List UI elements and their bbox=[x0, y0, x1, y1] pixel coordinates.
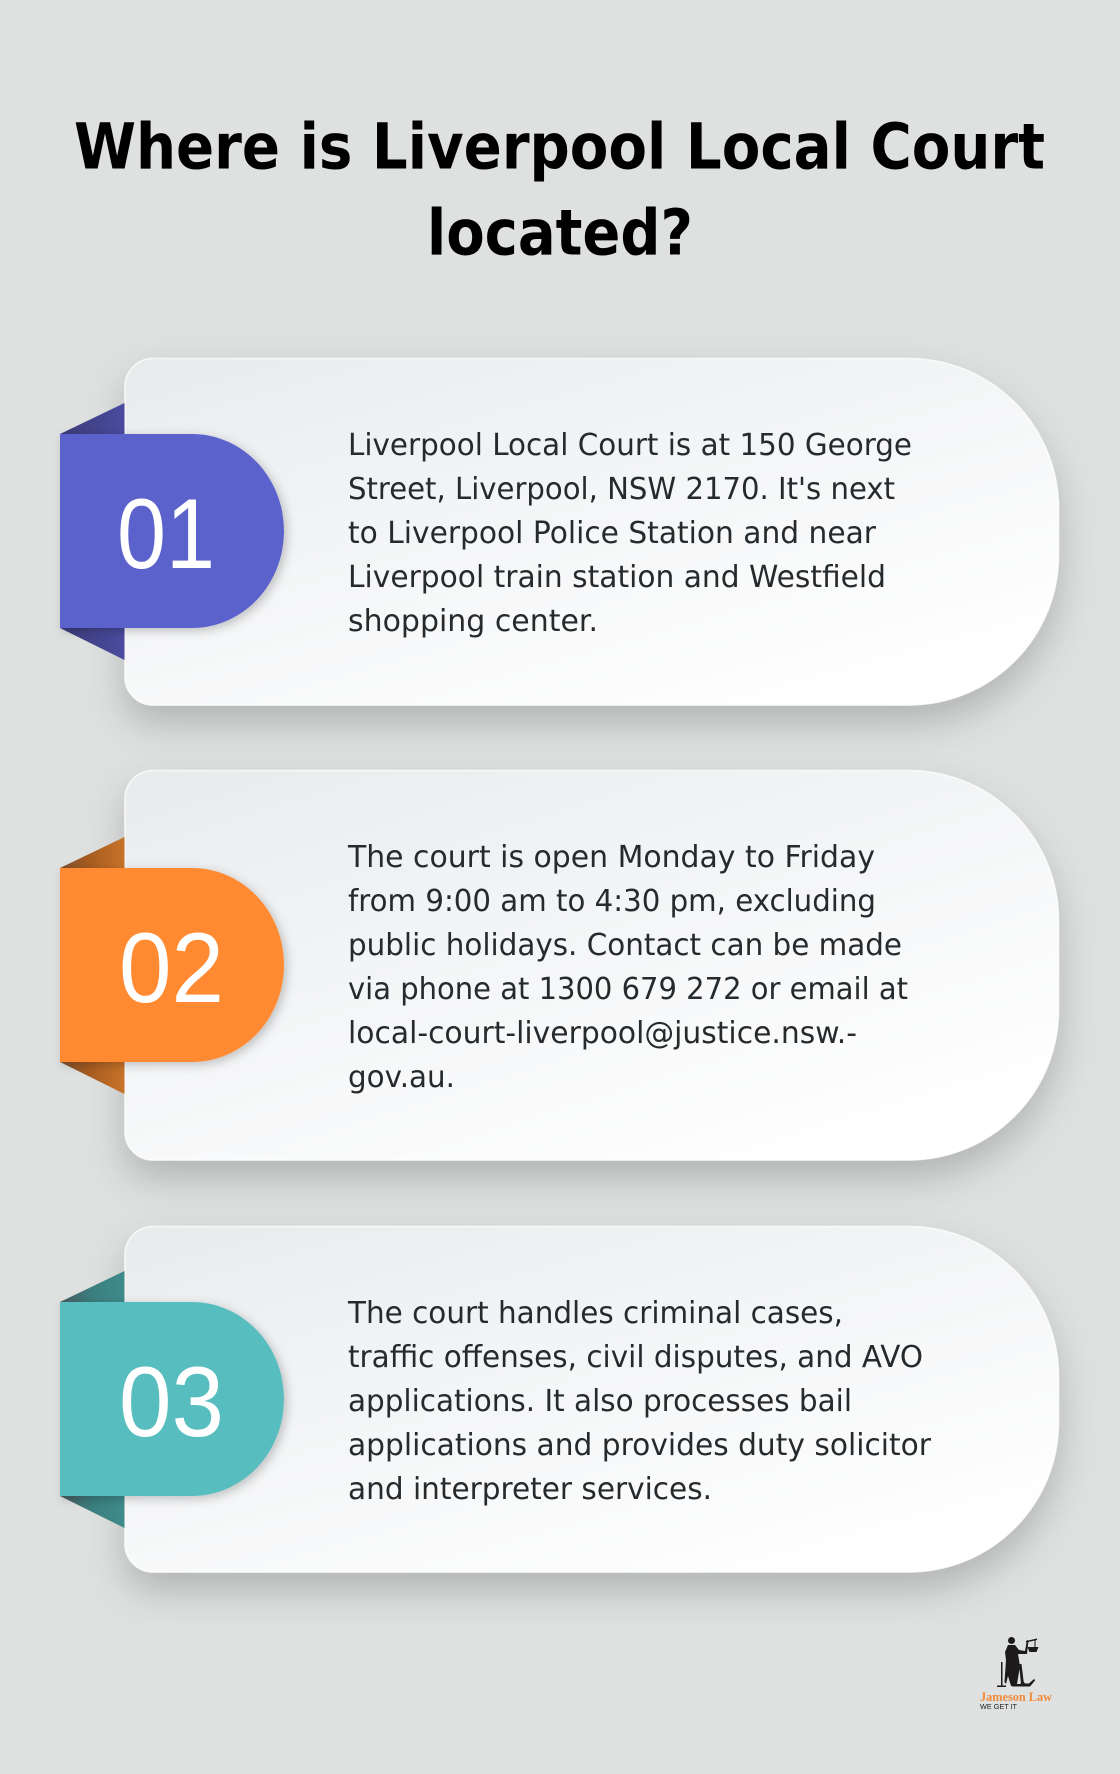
panel: step 02 bbox=[60, 770, 1059, 1160]
ribbon fold top 02 bbox=[60, 837, 124, 868]
card 01 bbox=[125, 358, 1059, 705]
panel: step 01 bbox=[60, 358, 1059, 705]
text 03: The court handles criminal cases, bbox=[347, 1296, 843, 1331]
text 01: to Liverpool Police Station and near bbox=[348, 516, 877, 551]
title: located? bbox=[427, 196, 693, 270]
text 03 bbox=[347, 1296, 932, 1507]
text 02: The court is open Monday to Friday bbox=[347, 840, 875, 875]
tagline: WE GET IT bbox=[980, 1704, 1018, 1711]
text 01: shopping center. bbox=[348, 604, 598, 639]
text 03: applications. It also processes bail bbox=[348, 1384, 852, 1419]
number 01: 01 bbox=[117, 478, 215, 589]
logo: Jameson Law bbox=[980, 1637, 1052, 1711]
ribbon fold bottom 01 bbox=[60, 628, 124, 660]
card 02 bbox=[125, 770, 1059, 1160]
panel: step 03 bbox=[60, 1226, 1059, 1572]
ribbon fold top 01 bbox=[60, 403, 124, 434]
text 01 bbox=[348, 428, 912, 639]
text 02: via phone at 1300 679 272 or email at bbox=[348, 972, 908, 1007]
icon: lady justice bbox=[997, 1637, 1038, 1687]
ribbon fold bottom 02 bbox=[60, 1062, 124, 1094]
text 03: traffic offenses, civil disputes, and AVO bbox=[348, 1340, 923, 1375]
text 01: Street, Liverpool, NSW 2170. It's next bbox=[348, 472, 895, 507]
ribbon fold top 03 bbox=[60, 1271, 124, 1302]
text 03: applications and provides duty solicitor bbox=[348, 1428, 932, 1463]
text 01: Liverpool train station and Westfield bbox=[348, 560, 886, 595]
number badge 02 bbox=[60, 868, 284, 1062]
text 02: public holidays. Contact can be made bbox=[348, 928, 902, 963]
number 02: 02 bbox=[119, 912, 224, 1023]
text 02: local-court-liverpool@justice.nsw.- bbox=[348, 1016, 857, 1051]
number badge 01 bbox=[60, 434, 284, 628]
title bbox=[74, 110, 1045, 270]
brand name: Jameson Law bbox=[980, 1690, 1052, 1704]
text 02 bbox=[347, 840, 908, 1095]
card 03 bbox=[125, 1226, 1059, 1572]
text 02: gov.au. bbox=[348, 1060, 455, 1095]
ribbon fold bottom 03 bbox=[60, 1496, 124, 1528]
text 02: from 9:00 am to 4:30 pm, excluding bbox=[348, 884, 876, 919]
text 03: and interpreter services. bbox=[348, 1472, 712, 1507]
text 01: Liverpool Local Court is at 150 George bbox=[348, 428, 912, 463]
number 03: 03 bbox=[119, 1346, 224, 1457]
number badge 03 bbox=[60, 1302, 284, 1496]
